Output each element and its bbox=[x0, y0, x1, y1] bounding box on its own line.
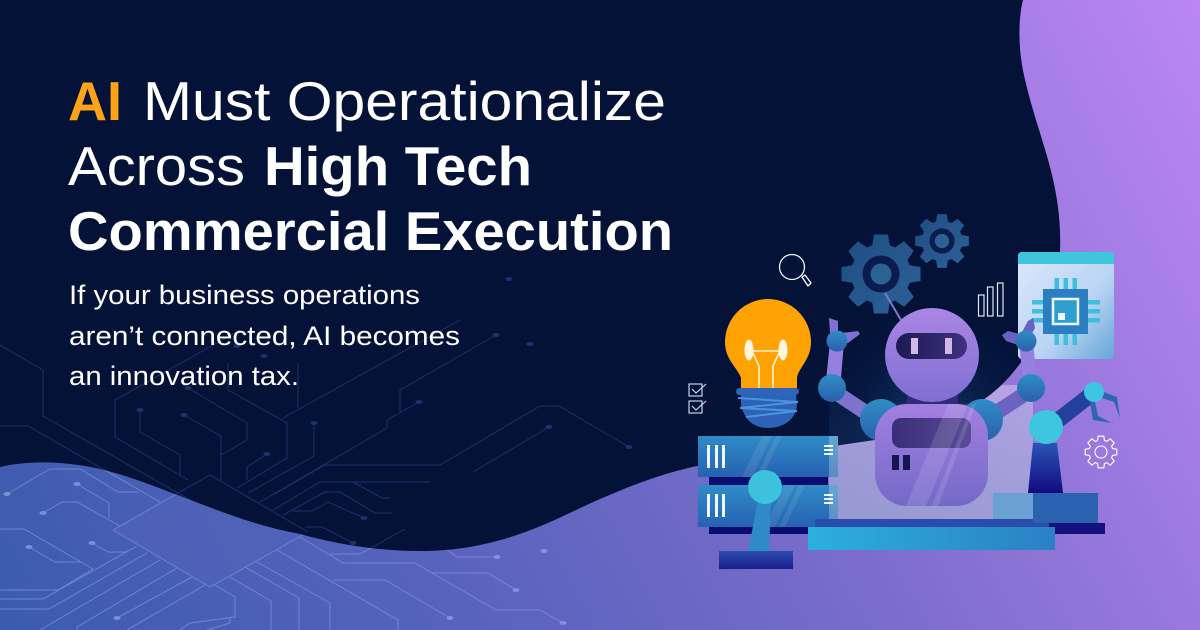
robot stem bbox=[885, 293, 901, 320]
server unit top bbox=[698, 436, 838, 477]
body screen bbox=[892, 418, 971, 448]
title: Must Operationalize bbox=[143, 70, 666, 132]
subtitle bbox=[69, 280, 460, 391]
icon: light bulb bbox=[725, 299, 811, 428]
icon: magnifier bbox=[780, 254, 811, 286]
robot neck bbox=[907, 392, 958, 406]
bulb base bbox=[736, 388, 799, 428]
subtitle: aren’t connected, AI becomes bbox=[69, 321, 460, 351]
robot left arm bbox=[818, 318, 880, 422]
robot head bbox=[885, 308, 979, 402]
icon: large gear bbox=[842, 234, 920, 314]
claw bbox=[1090, 391, 1120, 423]
subtitle: an innovation tax. bbox=[69, 361, 299, 391]
platform bbox=[808, 519, 1105, 550]
translucent light panel behind robot bbox=[829, 385, 1033, 520]
robotic arm on the right bbox=[993, 382, 1120, 523]
circuit pattern on dark background bbox=[0, 277, 632, 554]
robot glow bbox=[810, 300, 1050, 500]
subtitle: If your business operations bbox=[69, 280, 420, 310]
title: High Tech bbox=[264, 135, 532, 197]
icon: checklist bbox=[689, 384, 706, 413]
robot body bbox=[875, 404, 988, 506]
circuit pattern on wave bbox=[0, 469, 566, 630]
icon: small gear bbox=[915, 214, 969, 268]
window with chip bbox=[1018, 252, 1114, 359]
robot right arm bbox=[982, 318, 1045, 422]
icon: outline gear bbox=[1085, 436, 1117, 468]
server stack bbox=[698, 436, 838, 534]
title: Commercial Execution bbox=[68, 200, 673, 262]
icon: bar chart bbox=[978, 283, 1003, 316]
server unit bottom bbox=[698, 485, 838, 527]
title: AI bbox=[68, 70, 122, 132]
title: Across bbox=[68, 135, 245, 197]
icon: chip bbox=[1032, 278, 1100, 345]
robot shoulders bbox=[860, 399, 1003, 441]
visor bbox=[896, 333, 967, 359]
title bbox=[68, 70, 673, 262]
joystick bbox=[719, 470, 793, 569]
